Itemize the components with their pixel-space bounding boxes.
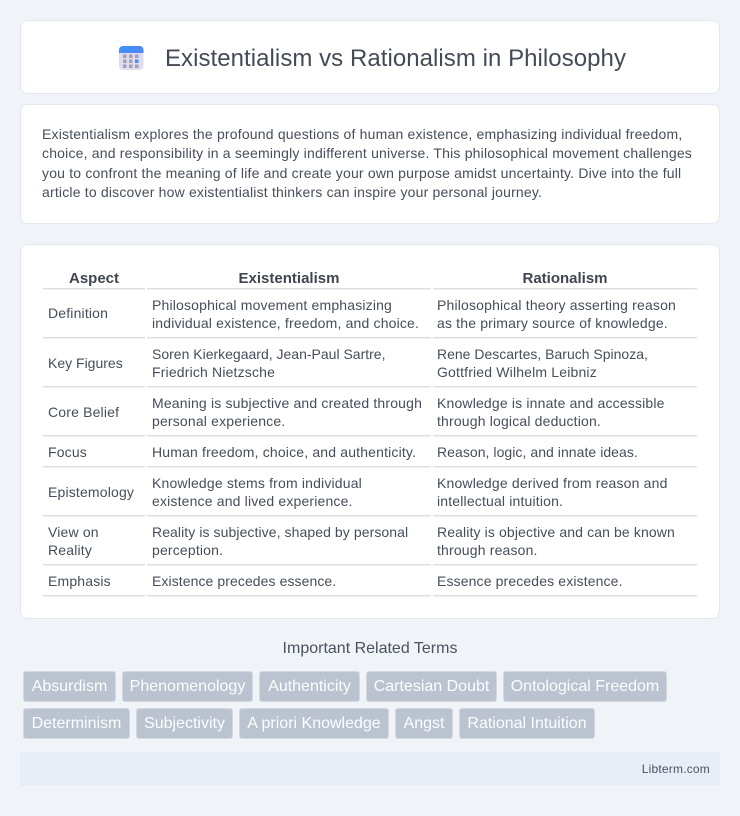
table header: Aspect: [69, 270, 119, 287]
related term tags: Absurdism: [32, 678, 107, 695]
row: View on Reality: Reality: [48, 542, 92, 558]
related term tags: Phenomenology: [130, 678, 245, 695]
panel: header: [20, 20, 720, 94]
row: View on Reality: [48, 524, 675, 558]
row: Epistemology: Knowledge stems from individual: [152, 475, 362, 491]
related term tags: Ontological Freedom: [511, 678, 659, 695]
row: Definition: [48, 297, 676, 331]
row: Key Figures: Rene Descartes, Baruch Spinoza,: [437, 346, 648, 362]
row: View on Reality: through reason.: [437, 542, 538, 558]
related term tags: Rational Intuition: [467, 715, 587, 732]
row: Epistemology: Epistemology: [48, 484, 134, 500]
related term tags: Angst: [404, 715, 444, 732]
related term tags: Determinism: [32, 715, 121, 732]
related term tags: Subjectivity: [144, 715, 225, 732]
footer: Libterm.com: [642, 762, 710, 776]
row: Key Figures: [48, 346, 648, 380]
row: Emphasis: Essence precedes existence.: [437, 573, 623, 589]
row: Focus: Human freedom, choice, and authenticity.: [152, 444, 416, 460]
row: Definition: Definition: [48, 305, 108, 321]
text block: introduction: article to discover how existentialist thinkers can inspire your personal journey.: [42, 184, 542, 200]
row: Definition: as the primary source of knowledge.: [437, 315, 668, 331]
text block: introduction: [42, 126, 692, 200]
row: Definition: Philosophical theory asserting reason: [437, 297, 676, 313]
title: Existentialism vs Rationalism in Philosophy: [165, 45, 626, 72]
row: Key Figures: Friedrich Nietzsche: [152, 364, 275, 380]
row: Epistemology: intellectual intuition.: [437, 493, 563, 509]
row: Core Belief: through logical deduction.: [437, 413, 601, 429]
row: Core Belief: personal experience.: [152, 413, 285, 429]
row: Emphasis: [48, 573, 623, 589]
related term tags: Cartesian Doubt: [374, 678, 489, 695]
row: Focus: [48, 444, 638, 460]
row: Key Figures: Soren Kierkegaard, Jean-Paul Sartre,: [152, 346, 385, 362]
row: Epistemology: existence and lived experience.: [152, 493, 353, 509]
row: View on Reality: View on: [48, 524, 99, 540]
row: Core Belief: [48, 395, 665, 429]
row: Focus: Focus: [48, 444, 87, 460]
panel: comparison table: [20, 244, 720, 619]
row: Key Figures: Key Figures: [48, 355, 123, 371]
row: Core Belief: Knowledge is innate and accessible: [437, 395, 665, 411]
row: Emphasis: Existence precedes essence.: [152, 573, 336, 589]
row: Key Figures: Gottfried Wilhelm Leibniz: [437, 364, 597, 380]
related term tags: A priori Knowledge: [247, 715, 381, 732]
row: Emphasis: Emphasis: [48, 573, 111, 589]
table header: Existentialism: [239, 270, 339, 287]
row: View on Reality: perception.: [152, 542, 223, 558]
table header: Rationalism: [522, 270, 608, 287]
row: Epistemology: [48, 475, 668, 509]
text block: introduction: choice, and responsibility in a seemingly indifferent universe. This philosophical movement challenges: [42, 145, 692, 161]
heading: related terms: Important Related Terms: [283, 640, 457, 657]
row: Definition: individual existence, freedom, and choice.: [152, 315, 419, 331]
text block: introduction: Existentialism explores the profound questions of human existence, emphasizing individual freedom,: [42, 126, 682, 142]
row: View on Reality: Reality is subjective, shaped by personal: [152, 524, 408, 540]
row: View on Reality: Reality is objective and can be known: [437, 524, 675, 540]
row: Core Belief: Core Belief: [48, 404, 119, 420]
row: Definition: Philosophical movement emphasizing: [152, 297, 392, 313]
row: Epistemology: Knowledge derived from reason and: [437, 475, 668, 491]
row: Focus: Reason, logic, and innate ideas.: [437, 444, 638, 460]
footer: [20, 752, 720, 786]
panel: introduction: [20, 104, 720, 224]
related term tags: Authenticity: [268, 678, 351, 695]
related term tags: [23, 671, 667, 739]
text block: introduction: you to confront the meaning of life and create your own purpose amidst uncertainty. Dive into the full: [42, 165, 681, 181]
icon: calendar: [119, 46, 144, 70]
row: Core Belief: Meaning is subjective and created through: [152, 395, 422, 411]
table header: [69, 270, 608, 287]
